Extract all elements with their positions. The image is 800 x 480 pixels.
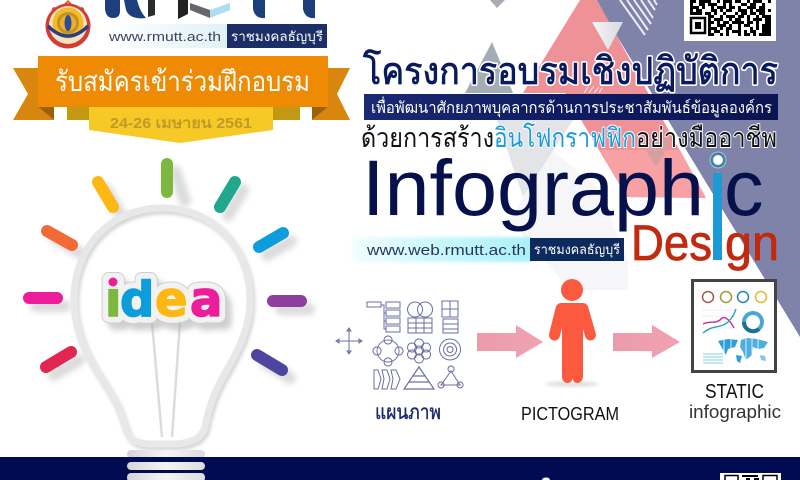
second heading (361, 123, 777, 153)
idea word: d (120, 272, 154, 328)
static infographic frame (692, 280, 776, 372)
arrow 1 (477, 325, 543, 358)
icon: pyramid (404, 367, 434, 389)
idea word: i (105, 272, 121, 328)
date tag: 24-26 เมษายน 2561 (110, 115, 252, 132)
idea word: e (161, 279, 194, 335)
icon: bulb screw top (127, 450, 205, 458)
idea word: i (111, 279, 127, 335)
design headline: gn (725, 215, 779, 271)
idea word (105, 272, 228, 335)
idea word: e (155, 272, 188, 328)
second heading: อย่างมืออาชีพ (636, 123, 777, 153)
icon: four-way arrows (336, 328, 362, 354)
ribbon banner (13, 56, 350, 120)
idea word: a (196, 279, 228, 335)
top qr code (684, 0, 776, 41)
design headline (631, 152, 779, 271)
idea word: e (155, 272, 188, 328)
idea word: d (120, 272, 154, 328)
website strip: web.rmutt (352, 237, 624, 262)
line chart (702, 309, 736, 333)
background geometric shapes (465, 0, 800, 337)
idea word: d (120, 272, 154, 328)
icon: target (440, 339, 461, 360)
idea word: a (190, 272, 222, 328)
label: pictogram: PICTOGRAM (521, 404, 619, 424)
ribbon banner: รับสมัครเข้าร่วมฝึกอบรม (55, 66, 310, 97)
second heading: ด้วยการสร้าง (361, 123, 494, 153)
icon: table (408, 318, 432, 333)
diagram icons: แผนภาพ (336, 301, 463, 389)
icon: percent rings (702, 292, 766, 302)
icon: triangle of circles (438, 366, 463, 388)
icon: flower (408, 339, 431, 363)
label: static infographic: STATIC (705, 381, 764, 403)
world map (718, 338, 768, 363)
icon: bulb rays (29, 164, 301, 370)
icon: shared letter i with ring (710, 152, 726, 260)
idea word: i (105, 272, 121, 328)
arrow 2 (613, 325, 680, 358)
second heading: อินโฟกราฟฟิก (494, 123, 636, 153)
infographic headline: c (724, 143, 764, 232)
date tag (67, 107, 300, 143)
university seal (46, 0, 90, 48)
idea word: d (126, 279, 160, 335)
icon: org chart (367, 302, 400, 332)
RMUTT logo (105, 0, 315, 19)
icon: stacked box (443, 319, 458, 333)
subtitle band: เพื่อพัฒนาศักยภาพบุคลากรด้านการประชาสัมพันธ์ข้อมูลองค์กร (371, 96, 772, 118)
infographic headline: Infograph (362, 143, 704, 232)
label: static infographic: infographic (689, 402, 781, 422)
idea word: a (190, 272, 222, 328)
website strip: web.rmutt: ราชมงคลธัญบุรี (534, 242, 620, 258)
idea word: i (105, 272, 121, 328)
icon: bulb outline (74, 208, 252, 447)
website strip: rmutt: www.rmutt.ac.th (108, 29, 221, 44)
pictogram person (545, 279, 599, 387)
light bulb (29, 164, 309, 458)
label: แผนภาพ: แผนภาพ (375, 402, 441, 424)
website strip: web.rmutt: www.web.rmutt.ac.th (366, 242, 526, 259)
subtitle band (364, 94, 778, 120)
icon: chevrons (374, 370, 400, 389)
idea word: a (190, 272, 222, 328)
design headline: Des (631, 215, 712, 271)
icon: bulb screw base (127, 462, 205, 480)
icon: bulb ray shadows (36, 171, 309, 378)
icon: venn (408, 302, 433, 317)
text lines (703, 354, 723, 363)
donut chart (744, 313, 762, 331)
bottom qr code (720, 473, 781, 480)
website strip: rmutt: ราชมงคลธัญบุรี (231, 29, 323, 45)
icon: cycle (373, 336, 403, 366)
bottom bar (0, 457, 800, 480)
idea word: e (155, 272, 188, 328)
website strip: rmutt (106, 24, 327, 48)
icon: quad grid (442, 301, 458, 317)
label: static infographic (689, 381, 781, 422)
